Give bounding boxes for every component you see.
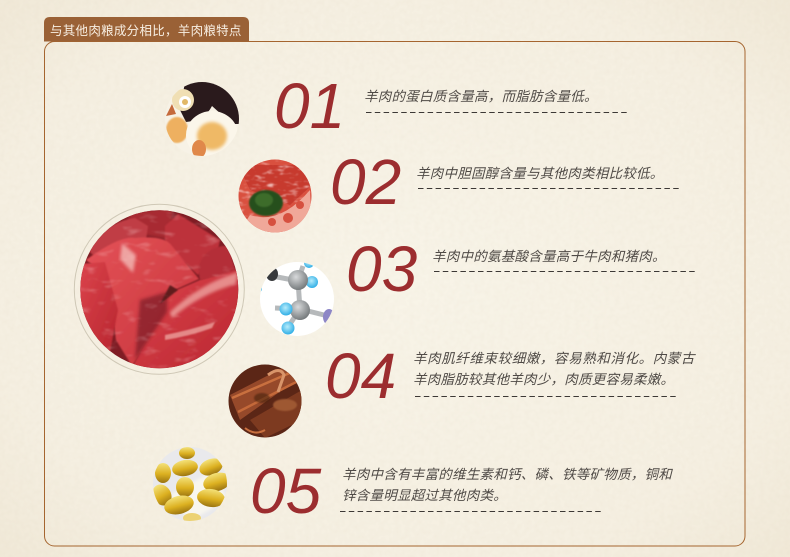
item 05 description: 羊肉中含有丰富的维生素和钙、磷、铁等矿物质，铜和	[342, 467, 673, 482]
number 05: 05	[250, 455, 322, 527]
item 04 description	[413, 351, 697, 387]
item 05	[250, 455, 673, 527]
item 03 description: 羊肉中的氨基酸含量高于牛肉和猪肉。	[432, 249, 666, 264]
item 01	[274, 70, 630, 142]
item 04	[325, 340, 697, 412]
number 03: 03	[346, 233, 418, 305]
item 05 description: 锌含量明显超过其他肉类。	[342, 488, 507, 503]
image: item 02 sliced meat with greens	[238, 159, 312, 233]
heading tab	[44, 17, 249, 42]
item 02 description: 羊肉中胆固醇含量与其他肉类相比较低。	[416, 166, 664, 181]
heading tab: 与其他肉粮成分相比，羊肉粮特点	[50, 23, 242, 38]
image: item 04 dried meat sticks	[228, 364, 302, 438]
image: large raw lamb meat	[74, 204, 244, 374]
image: item 01 food	[165, 82, 240, 159]
number 04: 04	[325, 340, 396, 412]
item 02	[330, 146, 682, 218]
item 01 description: 羊肉的蛋白质含量高，而脂肪含量低。	[364, 89, 598, 104]
item 05 description	[342, 467, 673, 503]
image: item 03 molecule model	[260, 262, 334, 336]
image: item 05 fish oil capsules	[153, 447, 227, 521]
number 01: 01	[274, 70, 345, 142]
item 04 description: 羊肉肌纤维束较细嫩，容易熟和消化。内蒙古	[413, 351, 697, 366]
item 03	[346, 233, 698, 305]
item 04 description: 羊肉脂肪较其他羊肉少，肉质更容易柔嫩。	[413, 372, 674, 387]
number 02: 02	[330, 146, 401, 218]
